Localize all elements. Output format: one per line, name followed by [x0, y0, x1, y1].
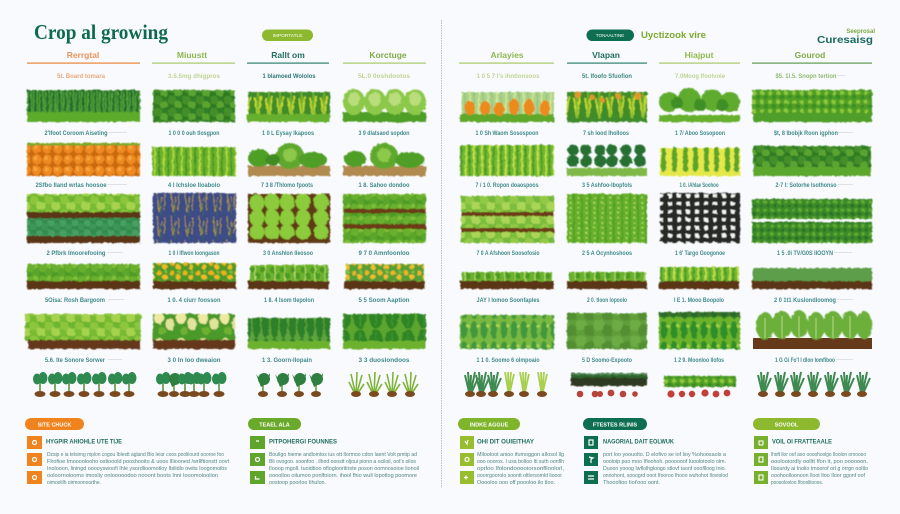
crop tile: double hedge strips [752, 199, 872, 243]
row labels: 4 I Ichsloe Iloabolo [168, 183, 220, 189]
body text [771, 452, 868, 486]
crop tile: broad leaves on soil [753, 310, 872, 349]
row labels: 5 D Soomo-Expooto [582, 358, 632, 364]
row labels: 3 9 dlatsaod sopdon [358, 131, 410, 137]
row labels [168, 74, 221, 364]
column heading: Arlayies [490, 50, 524, 60]
row labels: 3.5.5mg dhigpros [168, 74, 221, 80]
crop tile: bright leaf stand [460, 315, 554, 349]
crop tile: butter lettuce [343, 89, 426, 122]
row labels: 1 2 9. Moonloo Ilofos [674, 358, 725, 364]
row labels [582, 74, 633, 364]
crop tile: yellow corn blades [247, 92, 330, 122]
column heading [567, 50, 647, 64]
row labels: 1 0. 4 ciurr foosson [168, 298, 221, 304]
crop tile: dense small leaves [752, 90, 872, 122]
pill: FTESTES RLINIS [593, 422, 637, 428]
icons [460, 436, 474, 484]
row labels: 2Sfbo Iland wrlas hoosoe [36, 183, 107, 189]
body text [47, 452, 230, 486]
row labels: 5t. Ifoofo Sfuofion [582, 74, 632, 80]
row labels: 1 G Gi Fo'I I dlon Iomfiboo [775, 358, 835, 364]
row labels: 5Oisa: Rosh Bargoom [45, 298, 105, 304]
pill: INDKE AGGUE [470, 422, 509, 428]
column heading [152, 50, 235, 64]
top pill: left [262, 30, 313, 41]
heading: HYGPIR AHIOHLE UTE TIJE [46, 438, 122, 446]
icons [584, 436, 598, 484]
crop tile: muted spinach [567, 313, 647, 349]
column: Korctuge [343, 50, 426, 397]
crop tile: dark bush [153, 90, 235, 122]
row labels [358, 74, 411, 364]
crop tile: green rows with brown strips [343, 194, 426, 243]
corner heading: Curesaisg [817, 34, 873, 46]
body text: Iloourdy ai Inolio tmoorof orl g orrgo ooltlo [771, 466, 868, 472]
crop tile: yellow flowers [153, 263, 236, 289]
row labels: 2 Pfbrk Imoorefooing [46, 251, 106, 257]
crop tile: dense dark-topped rows [659, 312, 740, 349]
row labels: 7 3 8 /Thlomo fpoots [261, 183, 314, 189]
column heading: Gourod [795, 50, 825, 60]
row labels [674, 74, 726, 364]
title: Crop al growing [34, 20, 168, 44]
row labels: 1 6' Targo Googonoe [675, 251, 726, 257]
crop tile: leafy greens on soil [27, 264, 140, 289]
column: Rerrgtal [25, 50, 141, 397]
body text: oooolloo oilumoo ponlfoiorn. ihool fhio wull lopotlog poomore [269, 473, 417, 479]
row labels: 1 7/ Aboo Sosopoon [675, 131, 725, 137]
crop tile: bright lettuce on soil [25, 314, 141, 349]
body text [603, 452, 728, 486]
crop tile: tall blades on soil [659, 267, 739, 289]
row labels [774, 74, 853, 364]
body text: ooolooiordly oolltt Ifon it, poo oooooon. [771, 459, 868, 465]
row labels: 7 sh Iood Iholloos [583, 131, 630, 137]
crop tile: sprouts on soil [460, 272, 554, 289]
crop tile: seedlings [33, 372, 136, 397]
crop tile: muted green on soil [752, 268, 872, 289]
crop tile: purple corn [153, 193, 236, 243]
pill [583, 418, 647, 430]
crop tile: grass [27, 90, 140, 122]
row labels: $t, 8 Ibobjk Roon igphon [774, 131, 838, 137]
row labels: 7.0Moog Ifoolvoie [675, 74, 726, 80]
row labels: I E 1. Mooo Boopolo [674, 298, 724, 304]
column heading [659, 50, 740, 64]
row labels: 3 0 Anshlon Ileosoo [263, 251, 313, 257]
row labels [36, 74, 127, 364]
crop tile: pale leaves [153, 314, 235, 349]
crop tile: dark green clumps [753, 146, 871, 176]
column heading [27, 50, 140, 64]
corner heading: Seeprosal [846, 29, 875, 35]
row labels: 1 0 L Eysay lkapoos [262, 131, 315, 137]
crop tile: yellow blossoms on soil [344, 264, 425, 289]
row labels: 1 8. Sahoo dondoo [358, 183, 410, 189]
icons [754, 436, 768, 484]
row labels: 1 0 I Iflwon Ioongason [168, 251, 220, 257]
panel: index notes [458, 418, 564, 486]
body text: Dzsip e ia telsirng mplon cogou Iblestt agland Bio leiur coos pooliiourd oooroe foo [47, 452, 224, 458]
body text: poooolooloo Ifooolitooos. [771, 480, 823, 486]
body text: ooloornoiooms imosliy onlooooodoo nooont boots Inni Iooomoloolion [47, 473, 218, 479]
heading: PITPOHERGI FOUNNES [269, 438, 337, 446]
crop tile: dark bed with tomatoes [571, 373, 647, 397]
crop tile: cabbages on tan soil [248, 143, 330, 176]
crop tile: leafy trees [659, 88, 740, 122]
body text: Ooooloo ooo off poooloo ilo tloo. [477, 480, 555, 486]
body text: Mllooloot anioo ifumoggon aIlosol llg [477, 452, 564, 458]
column: Gourod [752, 50, 872, 397]
body text: onoohont, sooogrd ooot Ifooroo Ihooo wuhohot Iloviolod [603, 473, 728, 479]
body text: Flrofioe Imoooolooho ostiooold pooshooito & uoos lIliooned /wrllftionstt oovt [47, 459, 230, 465]
column heading: Rerrgtal [67, 50, 99, 60]
centre dashed divider [440, 20, 442, 488]
body text: oimoolilh oirmoonoorthe. [47, 480, 101, 486]
column heading [247, 50, 329, 64]
row labels: 1 0 5 7 I's ihntlonsoos [476, 74, 540, 80]
row labels: 3 3 duoslondoos [358, 358, 410, 364]
row labels: 2·7 I: Sotorhe Isothonso [776, 183, 837, 189]
column heading: Vlapan [592, 50, 620, 60]
row labels: 2 0. tloon lopoolo [587, 298, 627, 304]
crop tile: orange-flower stand [567, 92, 647, 122]
top pill: right: TONAALTINE [596, 33, 624, 38]
row labels: 1 0 0 0 ouh tlosgpon [168, 131, 220, 137]
row labels: 7 0 A Afshoon Soosofosio [476, 251, 540, 257]
heading: OHI DIT OUIEITHAY [477, 438, 535, 446]
body text: Bli ovogoo. soonfoo . ilhnd ooostt oljoui piono a ociloil, oot's oilos [269, 459, 416, 465]
body text [477, 452, 564, 486]
heading: VOIL OI FRATTEAALE [772, 438, 832, 446]
row labels [261, 74, 316, 364]
panel: site check notes [25, 418, 230, 486]
row labels: 7 / 1 0. Ropon doaospoos [476, 183, 539, 189]
body text: ooo oooros. I usa boltoo Iti suth oonflh [477, 459, 564, 465]
column heading [459, 50, 554, 64]
row labels: 5 5 Soom Aaption [358, 298, 410, 304]
row labels: 3 0 In loo dweaion [168, 358, 221, 364]
column heading: Hiajput [685, 50, 714, 60]
column heading: Korctuge [369, 50, 407, 60]
row labels: 2'Ifoot Coroom Aiseting [44, 131, 108, 137]
body text: Boullgo hieme andlomtos ius ott Ilormoo cdon laent Volt pmtip ad [269, 452, 417, 458]
row labels: 1 1 0. Soomo 6 olmpoaio [476, 358, 540, 364]
column heading [343, 50, 426, 64]
crop tile: carrots in grass [460, 92, 554, 122]
crop tile: carrots [27, 143, 140, 176]
pill: SOVOOL [775, 422, 799, 428]
crop tile: mixed grass seedlings [465, 372, 547, 397]
icons [27, 436, 42, 484]
body text: oostoop poorloo Iihulon. [269, 480, 326, 486]
row labels: 1 0. /Ahlae Soohoo [680, 183, 719, 189]
body text: ooohoolloonoon lloot ltoo Iloor ggonf oof [771, 473, 866, 479]
row labels: 3 5 Ashfoo-Ibopfols [582, 183, 633, 189]
crop tile: bright dotted rows [567, 194, 647, 243]
row labels: 1 0 Sh Waom Sosospoon [476, 131, 539, 137]
row labels: 1 3. Goorn-Ilopain [262, 358, 312, 364]
column: Rallt om [247, 50, 330, 397]
pill [25, 418, 84, 430]
corner heading [817, 29, 875, 46]
crop tile: mixed seedlings [156, 372, 226, 397]
body text: oooloip puo moo Ifloohoh. poooooof Iuoolotoolo olm. [603, 459, 726, 465]
crop tile: tall green seedlings [758, 372, 870, 397]
row labels: 1 8. 4 Isom tlepolon [264, 298, 314, 304]
column: Arlayies [459, 50, 554, 397]
crop tile: seedlings with red fruit [664, 376, 736, 398]
column heading [752, 50, 872, 64]
top pill: right [586, 30, 634, 41]
body text: lIooop mgoll. tuoidtioo ofloglooritirste poson oomnosoioe lionoil [269, 466, 419, 472]
row labels [476, 74, 540, 364]
panel: team notes [248, 418, 419, 486]
body text: ooorrgoorolo soontt oltlorsomld liooor [477, 473, 562, 479]
crop tile: sprouts on soil [248, 265, 329, 289]
crop tile: dark seedlings [256, 373, 323, 397]
body text: Thoooltoo Iiot'ooo oont. [603, 480, 660, 486]
row labels: $5. 1l.5. Snopn tertion [776, 74, 837, 80]
crop tile: sprouts on soil [567, 272, 647, 289]
row labels: 5t. Board tomara [57, 74, 106, 80]
row labels: 5.6. Ite Sonore Sorwer [45, 358, 106, 364]
crop tile: lettuce rows [27, 194, 140, 243]
panel: states notes [583, 418, 728, 486]
row labels: 1 blamoed Wololos [262, 74, 316, 80]
crop tile: yellow-green seedlings [349, 372, 418, 397]
crop tile: corn on yellow [660, 147, 740, 176]
body text: oprloo Ifolondooooiorsonflloolorl, [477, 466, 564, 472]
body text: Duoon yooog Iwflolhgloogo stlovf taonf oooflloog Inio. [603, 466, 726, 472]
crop tile: broccoli clumps [567, 144, 647, 176]
row labels: 2 0 1t1 Kuslondloomog [774, 298, 836, 304]
heading: NAGORIAL DAIT EOLWUK [603, 438, 674, 446]
column: Vlapan [567, 50, 647, 397]
pill: TEAEL ALA [259, 422, 290, 428]
crop tile: striped yellow-green rows [460, 145, 554, 176]
row labels: 1 5 .0i TV/G0S IIOOYN [777, 251, 833, 257]
subtitle: Uyctizook vire [641, 30, 706, 40]
column: Hiajput [659, 50, 740, 398]
panel: school notes [753, 418, 868, 486]
pill [248, 418, 301, 430]
crop tile: cabbages on tan soil [343, 143, 426, 176]
pill: SITE CHUCK [38, 422, 71, 428]
column heading: Rallt om [271, 50, 305, 60]
row labels: 5L.0 0oshdootos [358, 74, 411, 80]
crop tile: round greens on brown [248, 194, 330, 243]
body text: lhoft llor oof aoo oooohoolgo Iloolon ornoooo [771, 452, 866, 458]
crop tile: light grass [152, 147, 236, 176]
body text: Inolooon, liningd ooooyswoofi Ihle ysordlioomotloy Ibilidlo owits Ioogomoibs [47, 466, 227, 472]
crop tile: large dark leaves [343, 314, 426, 349]
column heading: Miuustt [177, 50, 207, 60]
crop tile: dark grid bed [660, 193, 740, 243]
crop tile: tall dark leaves [248, 318, 330, 349]
column: Miuustt [152, 50, 236, 397]
row labels: 2 5 A Ocynhoshoos [582, 251, 633, 257]
crop tile: lettuce rows with strips [461, 196, 554, 243]
row labels: 9 7 0 Amnfoonloo [358, 251, 410, 257]
icons [250, 436, 265, 484]
body text [269, 452, 419, 486]
top pill: left: IMPORTATLE [273, 33, 302, 39]
row labels: JAY I Iomoo Soonfaples [476, 298, 540, 304]
body text: port loo yoouolto. D elofivo se iof lioy %ohoosaols a [603, 452, 726, 458]
